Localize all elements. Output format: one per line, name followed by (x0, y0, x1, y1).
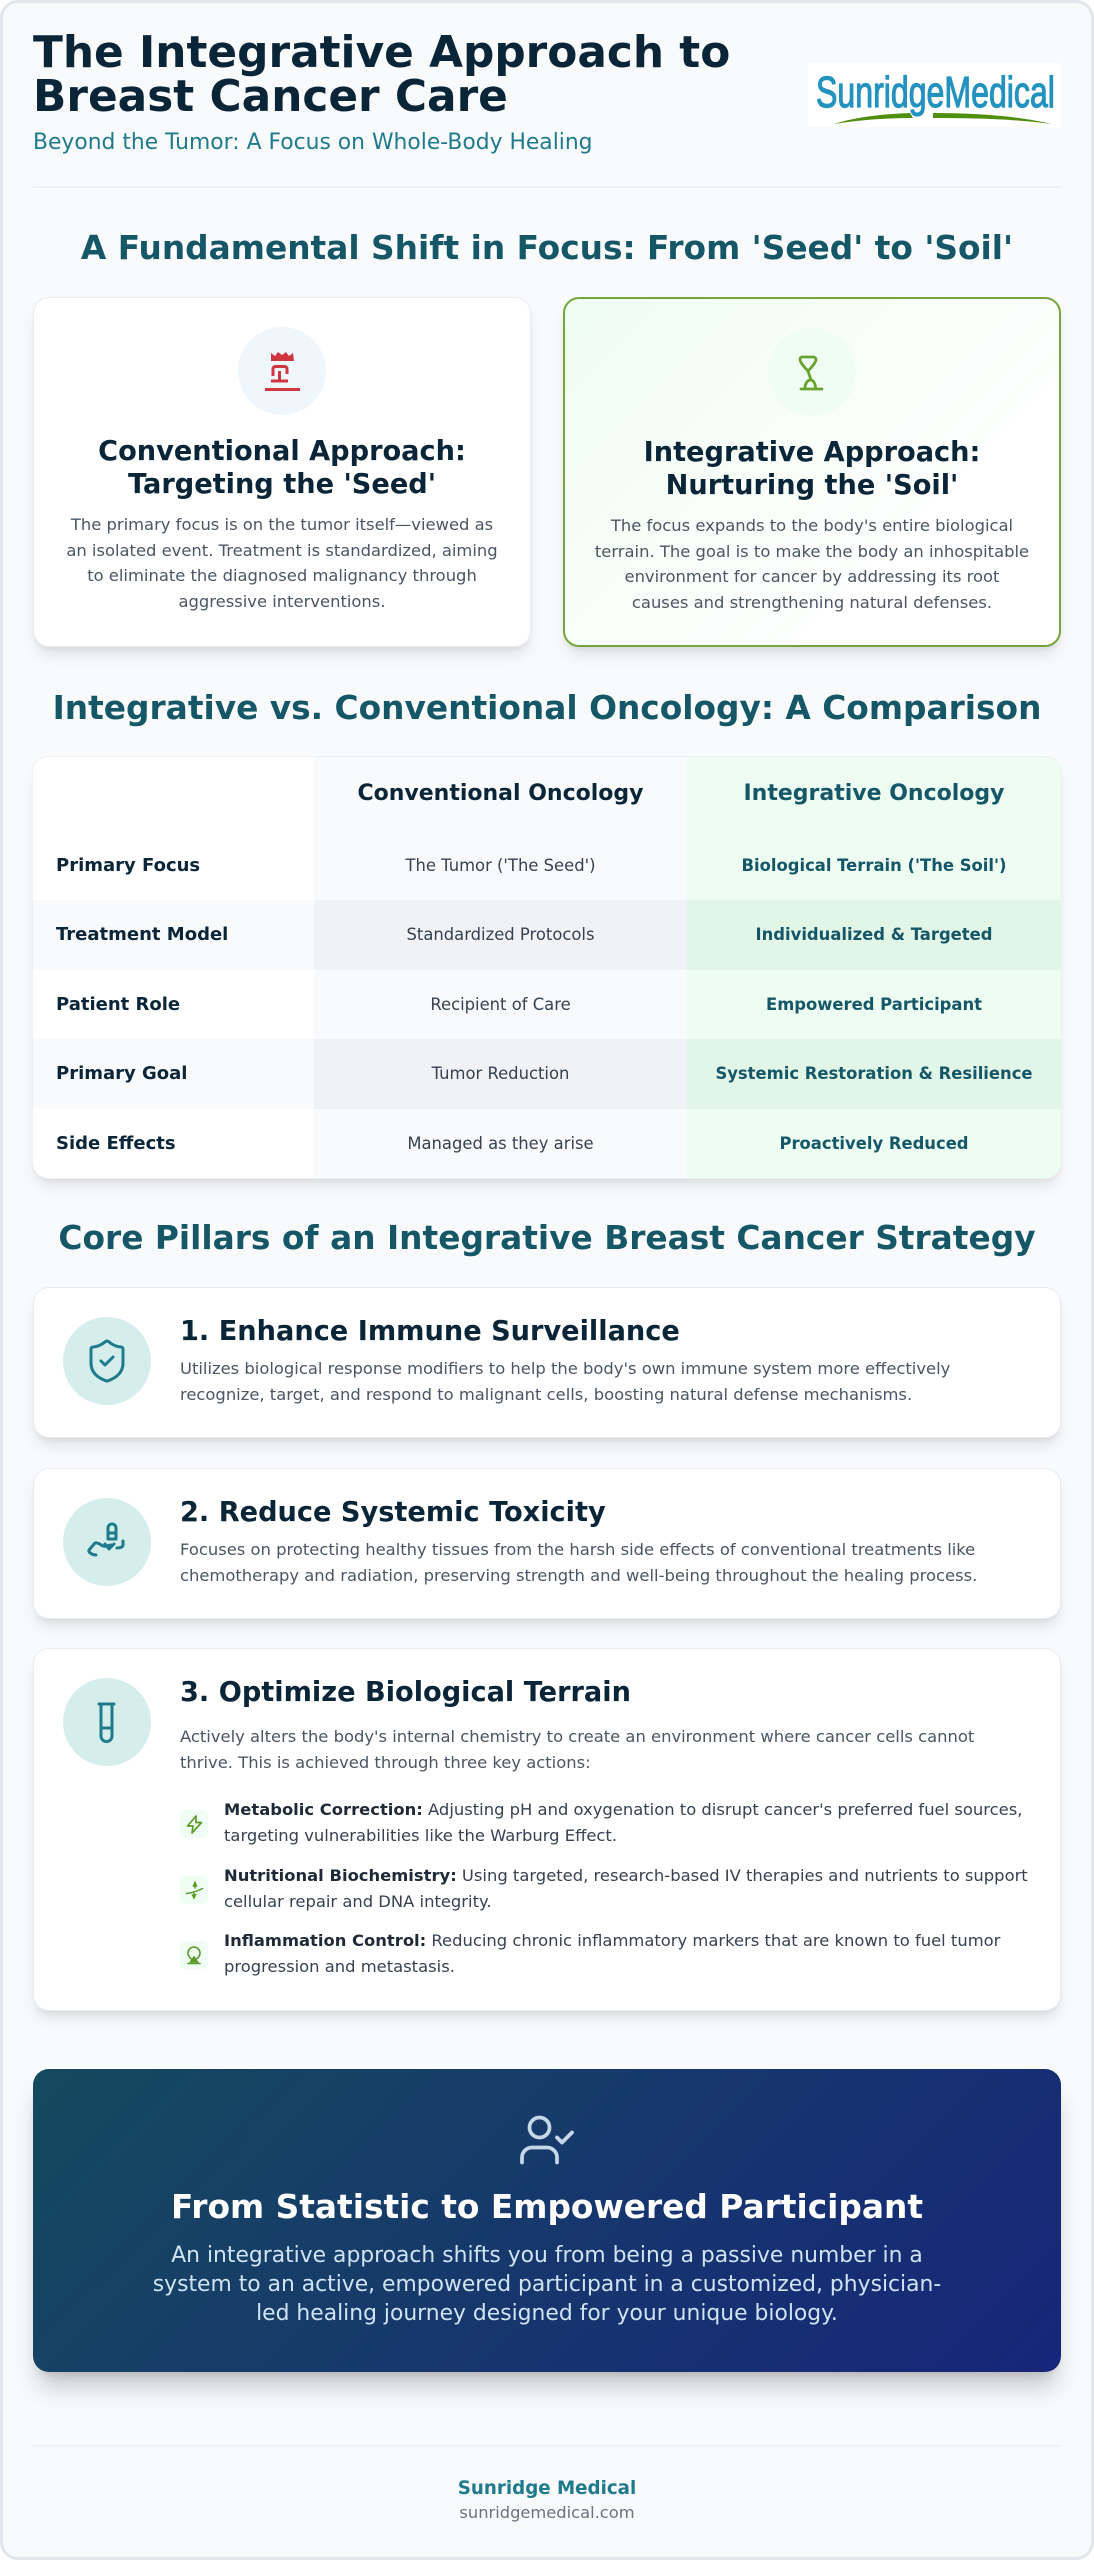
text: to eliminate the diagnosed malignancy through (87, 566, 477, 585)
text: aggressive interventions. (178, 592, 386, 611)
header divider (33, 186, 1061, 188)
row: treatment model (56, 900, 1061, 970)
row: patient role: Empowered Participant (766, 995, 982, 1014)
callout: empowered participant (33, 2069, 1061, 2372)
row: primary focus (56, 831, 1061, 900)
text (153, 2243, 941, 2326)
list text: inflammation control: progression and metastasis. (224, 1957, 455, 1976)
row: primary goal: Primary Goal (56, 1063, 187, 1084)
heading: From Statistic to Empowered Participant (171, 2188, 923, 2226)
list text: metabolic correction (224, 1800, 1022, 1845)
logo: Sunridge Medical: SunridgeMedical (816, 68, 1055, 117)
heading: Nurturing the 'Soil' (666, 470, 958, 501)
footer divider (33, 2445, 1061, 2447)
text: An integrative approach shifts you from being a passive number in a (171, 2243, 923, 2268)
footer url: sunridgemedical.com (459, 2503, 635, 2522)
text: environment for cancer by addressing its root (624, 567, 999, 586)
row: patient role (56, 970, 1061, 1039)
list text: nutritional biochemistry: cellular repair and DNA integrity. (224, 1892, 492, 1911)
text: recognize, target, and respond to malignant cells, boosting natural defense mechanisms. (180, 1385, 912, 1404)
heading: comparison: Integrative vs. Conventional Oncology: A Comparison (53, 689, 1041, 727)
row: treatment model: Standardized Protocols (406, 925, 594, 944)
title: The Integrative Approach to (33, 27, 730, 78)
heading: Conventional Approach: (98, 436, 466, 467)
row: side effects: Side Effects (56, 1133, 176, 1154)
row: side effects (56, 1109, 1061, 1178)
panel: pillar 2 (33, 1468, 1061, 1619)
text (180, 1540, 977, 1585)
text: causes and strengthening natural defenses. (632, 593, 992, 612)
text: Utilizes biological response modifiers to help the body's own immune system more effectively (180, 1359, 950, 1378)
icon: test tube (63, 1678, 151, 1766)
list icon: bolt (180, 1810, 208, 1838)
list icon: biochemistry (180, 1876, 208, 1904)
list text: inflammation control (224, 1931, 1000, 1976)
text: thrive. This is achieved through three key actions: (180, 1753, 591, 1772)
heading: Targeting the 'Seed' (128, 469, 436, 500)
text: The primary focus is on the tumor itself—viewed as (71, 515, 493, 534)
heading (644, 437, 980, 501)
table header: Conventional Oncology (358, 781, 644, 806)
heading: fundamental shift: A Fundamental Shift in Focus: From 'Seed' to 'Soil' (81, 229, 1013, 267)
row: primary goal: Tumor Reduction (432, 1064, 569, 1083)
list text: inflammation control: Inflammation Control: Reducing chronic inflammatory markers that are known to fuel tumor (224, 1931, 1000, 1950)
text (180, 1727, 974, 1772)
heading: 2. Reduce Systemic Toxicity (180, 1497, 606, 1528)
text: system to an active, empowered participant in a customized, physician- (153, 2272, 941, 2297)
text: terrain. The goal is to make the body an inhospitable (595, 542, 1029, 561)
heading: core pillars: Core Pillars of an Integrative Breast Cancer Strategy (58, 1219, 1036, 1257)
panel: pillar 1 (33, 1287, 1061, 1438)
list text: nutritional biochemistry (224, 1866, 1028, 1911)
text (66, 515, 498, 611)
title (33, 27, 730, 122)
panel: conventional approach (33, 297, 531, 647)
row: side effects: Managed as they arise (407, 1134, 594, 1153)
comparison table (33, 757, 1061, 1178)
heading: 1. Enhance Immune Surveillance (180, 1316, 680, 1347)
icon: green goblet (768, 328, 856, 416)
table header: Integrative Oncology (744, 781, 1004, 806)
text: Actively alters the body's internal chemistry to create an environment where cancer cells cannot (180, 1727, 974, 1746)
row: patient role: Recipient of Care (430, 995, 571, 1014)
text: led healing journey designed for your unique biology. (256, 2301, 838, 2326)
row: primary goal (56, 1039, 1061, 1109)
text: The focus expands to the body's entire biological (611, 516, 1013, 535)
icon: shield check (63, 1317, 151, 1405)
footer brand: Sunridge Medical (458, 2478, 636, 2499)
row: treatment model: Treatment Model (56, 924, 228, 945)
row: treatment model: Individualized & Targeted (756, 925, 992, 944)
table header (358, 757, 1061, 831)
heading: Integrative Approach: (644, 437, 980, 468)
heading: 3. Optimize Biological Terrain (180, 1677, 631, 1708)
icon: red tower (238, 327, 326, 415)
title: Breast Cancer Care (33, 71, 508, 122)
list text: nutritional biochemistry: Nutritional Biochemistry: Using targeted, research-based IV therapies and nutrients to support (224, 1866, 1028, 1885)
icon: hand with pill (63, 1498, 151, 1586)
text (180, 1359, 950, 1404)
row: primary focus: Primary Focus (56, 855, 200, 876)
row: primary goal: Systemic Restoration & Resilience (715, 1064, 1033, 1083)
text: an isolated event. Treatment is standardized, aiming (66, 541, 498, 560)
row: patient role: Patient Role (56, 994, 180, 1015)
heading (98, 436, 466, 500)
list icon: inflammation (180, 1941, 208, 1969)
list text: metabolic correction: targeting vulnerabilities like the Warburg Effect. (224, 1826, 617, 1845)
text: Focuses on protecting healthy tissues from the harsh side effects of conventional treatments like (180, 1540, 975, 1559)
row: side effects: Proactively Reduced (779, 1134, 969, 1153)
row: primary focus: Biological Terrain ('The Soil') (741, 856, 1007, 875)
panel: integrative approach (563, 297, 1061, 647)
list text: metabolic correction: Metabolic Correction: Adjusting pH and oxygenation to disrupt cancer's preferred fuel sources, (224, 1800, 1022, 1819)
icon: user check (520, 2116, 574, 2164)
subtitle: Beyond the Tumor: A Focus on Whole-Body Healing (33, 130, 593, 155)
text (595, 516, 1029, 612)
row: primary focus: The Tumor ('The Seed') (405, 856, 596, 875)
panel: pillar 3 (33, 1648, 1061, 2011)
text: chemotherapy and radiation, preserving strength and well-being throughout the healing process. (180, 1566, 977, 1585)
